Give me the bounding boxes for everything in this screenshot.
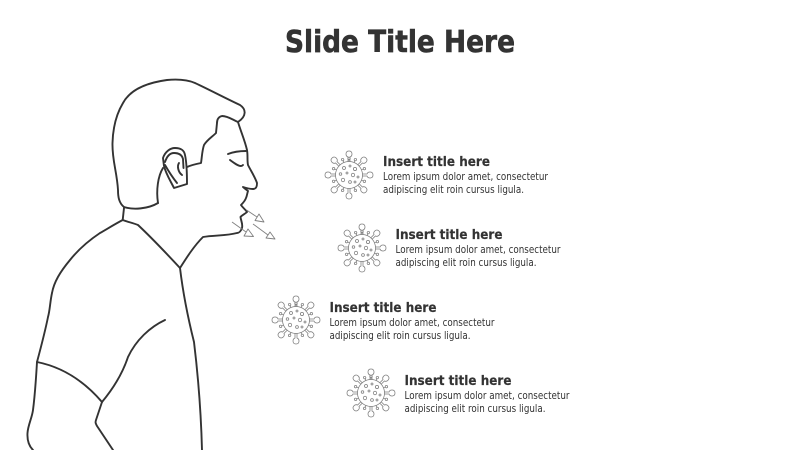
item 2 body: adipiscing elit roin cursus ligula.: [396, 257, 536, 269]
sleeve edge: [37, 362, 102, 402]
arrows: cough droplets: [232, 210, 275, 239]
item 1 title: Insert title here: [383, 155, 490, 170]
title: Slide Title Here: [285, 25, 515, 60]
item 1: [325, 151, 549, 199]
arrow 3: [253, 224, 275, 239]
icon: virus 3: [272, 296, 320, 344]
item 3 body: Lorem ipsum dolor amet, consectetur: [330, 317, 495, 329]
item 4 body: Lorem ipsum dolor amet, consectetur: [404, 390, 570, 402]
item 3: [272, 296, 495, 344]
item 2: [338, 224, 561, 272]
behind ear hairline: [157, 168, 163, 203]
item 3 title: Insert title here: [330, 301, 437, 316]
icon: virus 1: [325, 151, 373, 199]
head outline: hair, face and jaw: [112, 80, 257, 268]
icon: virus 2: [338, 224, 386, 272]
illustration: man coughing in profile: [27, 80, 257, 450]
icon: virus 4: [347, 369, 395, 417]
item 2 body: Lorem ipsum dolor amet, consectetur: [396, 244, 561, 256]
ear: [163, 148, 187, 188]
lower arm: [96, 402, 113, 450]
item 4: [347, 369, 570, 417]
item 3 body: adipiscing elit roin cursus ligula.: [330, 330, 470, 342]
eyebrow: [228, 151, 246, 154]
inner arm line: [102, 320, 165, 402]
neck: [123, 208, 124, 220]
item 1 body: Lorem ipsum dolor amet, consectetur: [383, 171, 549, 183]
chest line: [180, 268, 202, 450]
hairline and temple: [187, 116, 238, 167]
closed eye: [230, 160, 243, 166]
item 1 body: adipiscing elit roin cursus ligula.: [383, 184, 524, 196]
arrow 2: [232, 222, 254, 236]
arrow 1: [246, 210, 264, 222]
shirt collar and shoulder: [27, 220, 180, 450]
item 4 body: adipiscing elit roin cursus ligula.: [404, 403, 546, 415]
item 2 title: Insert title here: [396, 228, 503, 243]
item 4 title: Insert title here: [404, 374, 512, 389]
